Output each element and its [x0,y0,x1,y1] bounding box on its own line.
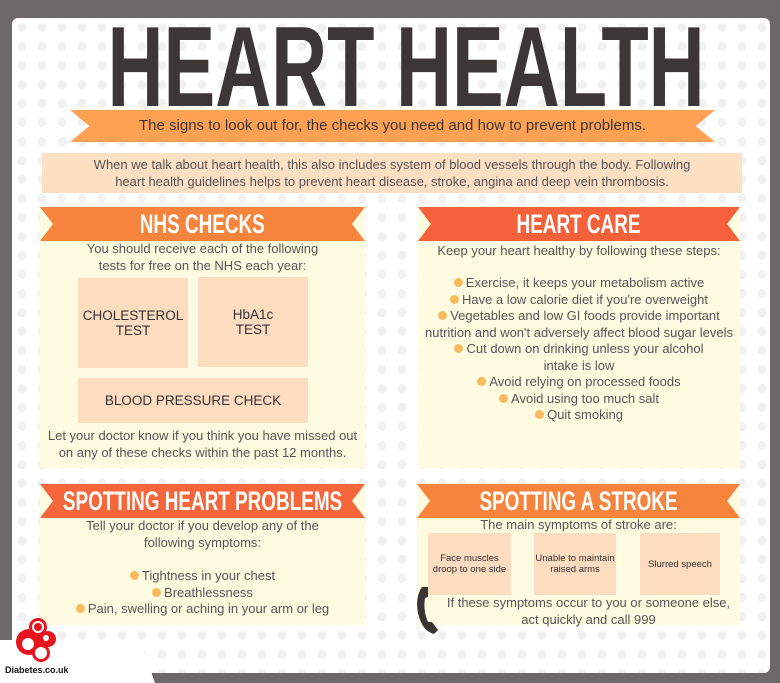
heading: NHS checks [40,207,365,241]
call text [447,595,730,626]
box: speech [640,533,720,595]
bottom-left corner shape [0,640,155,683]
box: face [428,533,511,595]
list: Exercise, it keeps your metabolism active [466,275,704,290]
intro [86,518,319,550]
symptom list: Tightness in your chest [142,568,275,583]
box: HbA1c: HbA1c [233,307,273,322]
logo: Diabetes.co.uk [5,618,69,675]
panel: spotting heart problems [40,484,365,625]
box: blood pressure: BLOOD PRESSURE CHECK [105,393,281,408]
icon: phone [417,587,438,634]
list: nutrition and won't adversely affect blood sugar levels [425,324,733,340]
box: HbA1c: TEST [236,322,270,337]
panel: NHS checks [40,207,365,468]
panel: spotting a stroke [417,484,740,625]
intro text block [42,153,742,193]
box: arms: raised arms [550,564,600,575]
panel: heart care [418,207,740,468]
intro text: tests for free on the NHS each year: [99,258,306,272]
intro text [87,241,318,272]
logo: Diabetes.co.uk: Diabetes.co.uk [5,665,69,675]
symptom list: Pain, swelling or aching in your arm or leg [88,601,329,616]
symptom list [76,568,329,616]
box: cholesterol: TEST [116,323,150,338]
intro text: You should receive each of the following [87,241,318,256]
heading: SPOTTING HEART PROBLEMS [63,486,342,516]
list: intake is low [544,358,614,372]
box: arms [534,533,616,595]
intro: following symptoms: [144,534,261,550]
title: HEART HEALTH [107,4,705,131]
box: speech: Slurred speech [648,558,712,570]
box: HbA1c [198,277,308,367]
list: Vegetables and low GI foods provide important [450,308,720,323]
list: Cut down on drinking unless your alcohol [466,341,704,356]
call text: If these symptoms occur to you or someone else, [447,595,730,610]
list: Quit smoking [547,407,623,422]
list: Have a low calorie diet if you're overweight [462,292,708,306]
box: blood pressure [78,378,308,423]
intro text block: When we talk about heart health, this also includes system of blood vessels through the body. Following [94,157,690,172]
subtitle ribbon: The signs to look out for, the checks you need and how to prevent problems. [139,117,646,134]
symptom list: Breathlessness [164,584,253,600]
box: arms: Unable to maintain [535,553,615,564]
intro text block: heart health guidelines helps to prevent heart disease, stroke, angina and deep vein thrombosis. [115,174,669,188]
call text: act quickly and call 999 [521,612,656,626]
list [425,275,733,422]
heading: heart care: HEART CARE [517,209,641,239]
box: cholesterol: CHOLESTEROL [83,308,183,323]
footer text: on any of these checks within the past 12 months. [59,444,346,460]
heading: heart care [418,207,740,241]
footer text [48,428,357,460]
footer text: Let your doctor know if you think you have missed out [48,428,357,443]
intro: Keep your heart healthy by following these steps: [437,243,721,258]
heading [417,484,740,518]
box: face: droop to one side [433,564,506,575]
heading: NHS checks: NHS CHECKS [140,209,265,239]
intro: Tell your doctor if you develop any of the [86,518,319,533]
heading: SPOTTING A STROKE [479,486,678,516]
box: cholesterol [78,278,188,368]
intro: The main symptoms of stroke are: [480,517,677,532]
list: Avoid relying on processed foods [489,374,681,389]
box: face: Face muscles [440,553,499,564]
subtitle ribbon [70,110,715,142]
list: Avoid using too much salt [511,390,659,406]
